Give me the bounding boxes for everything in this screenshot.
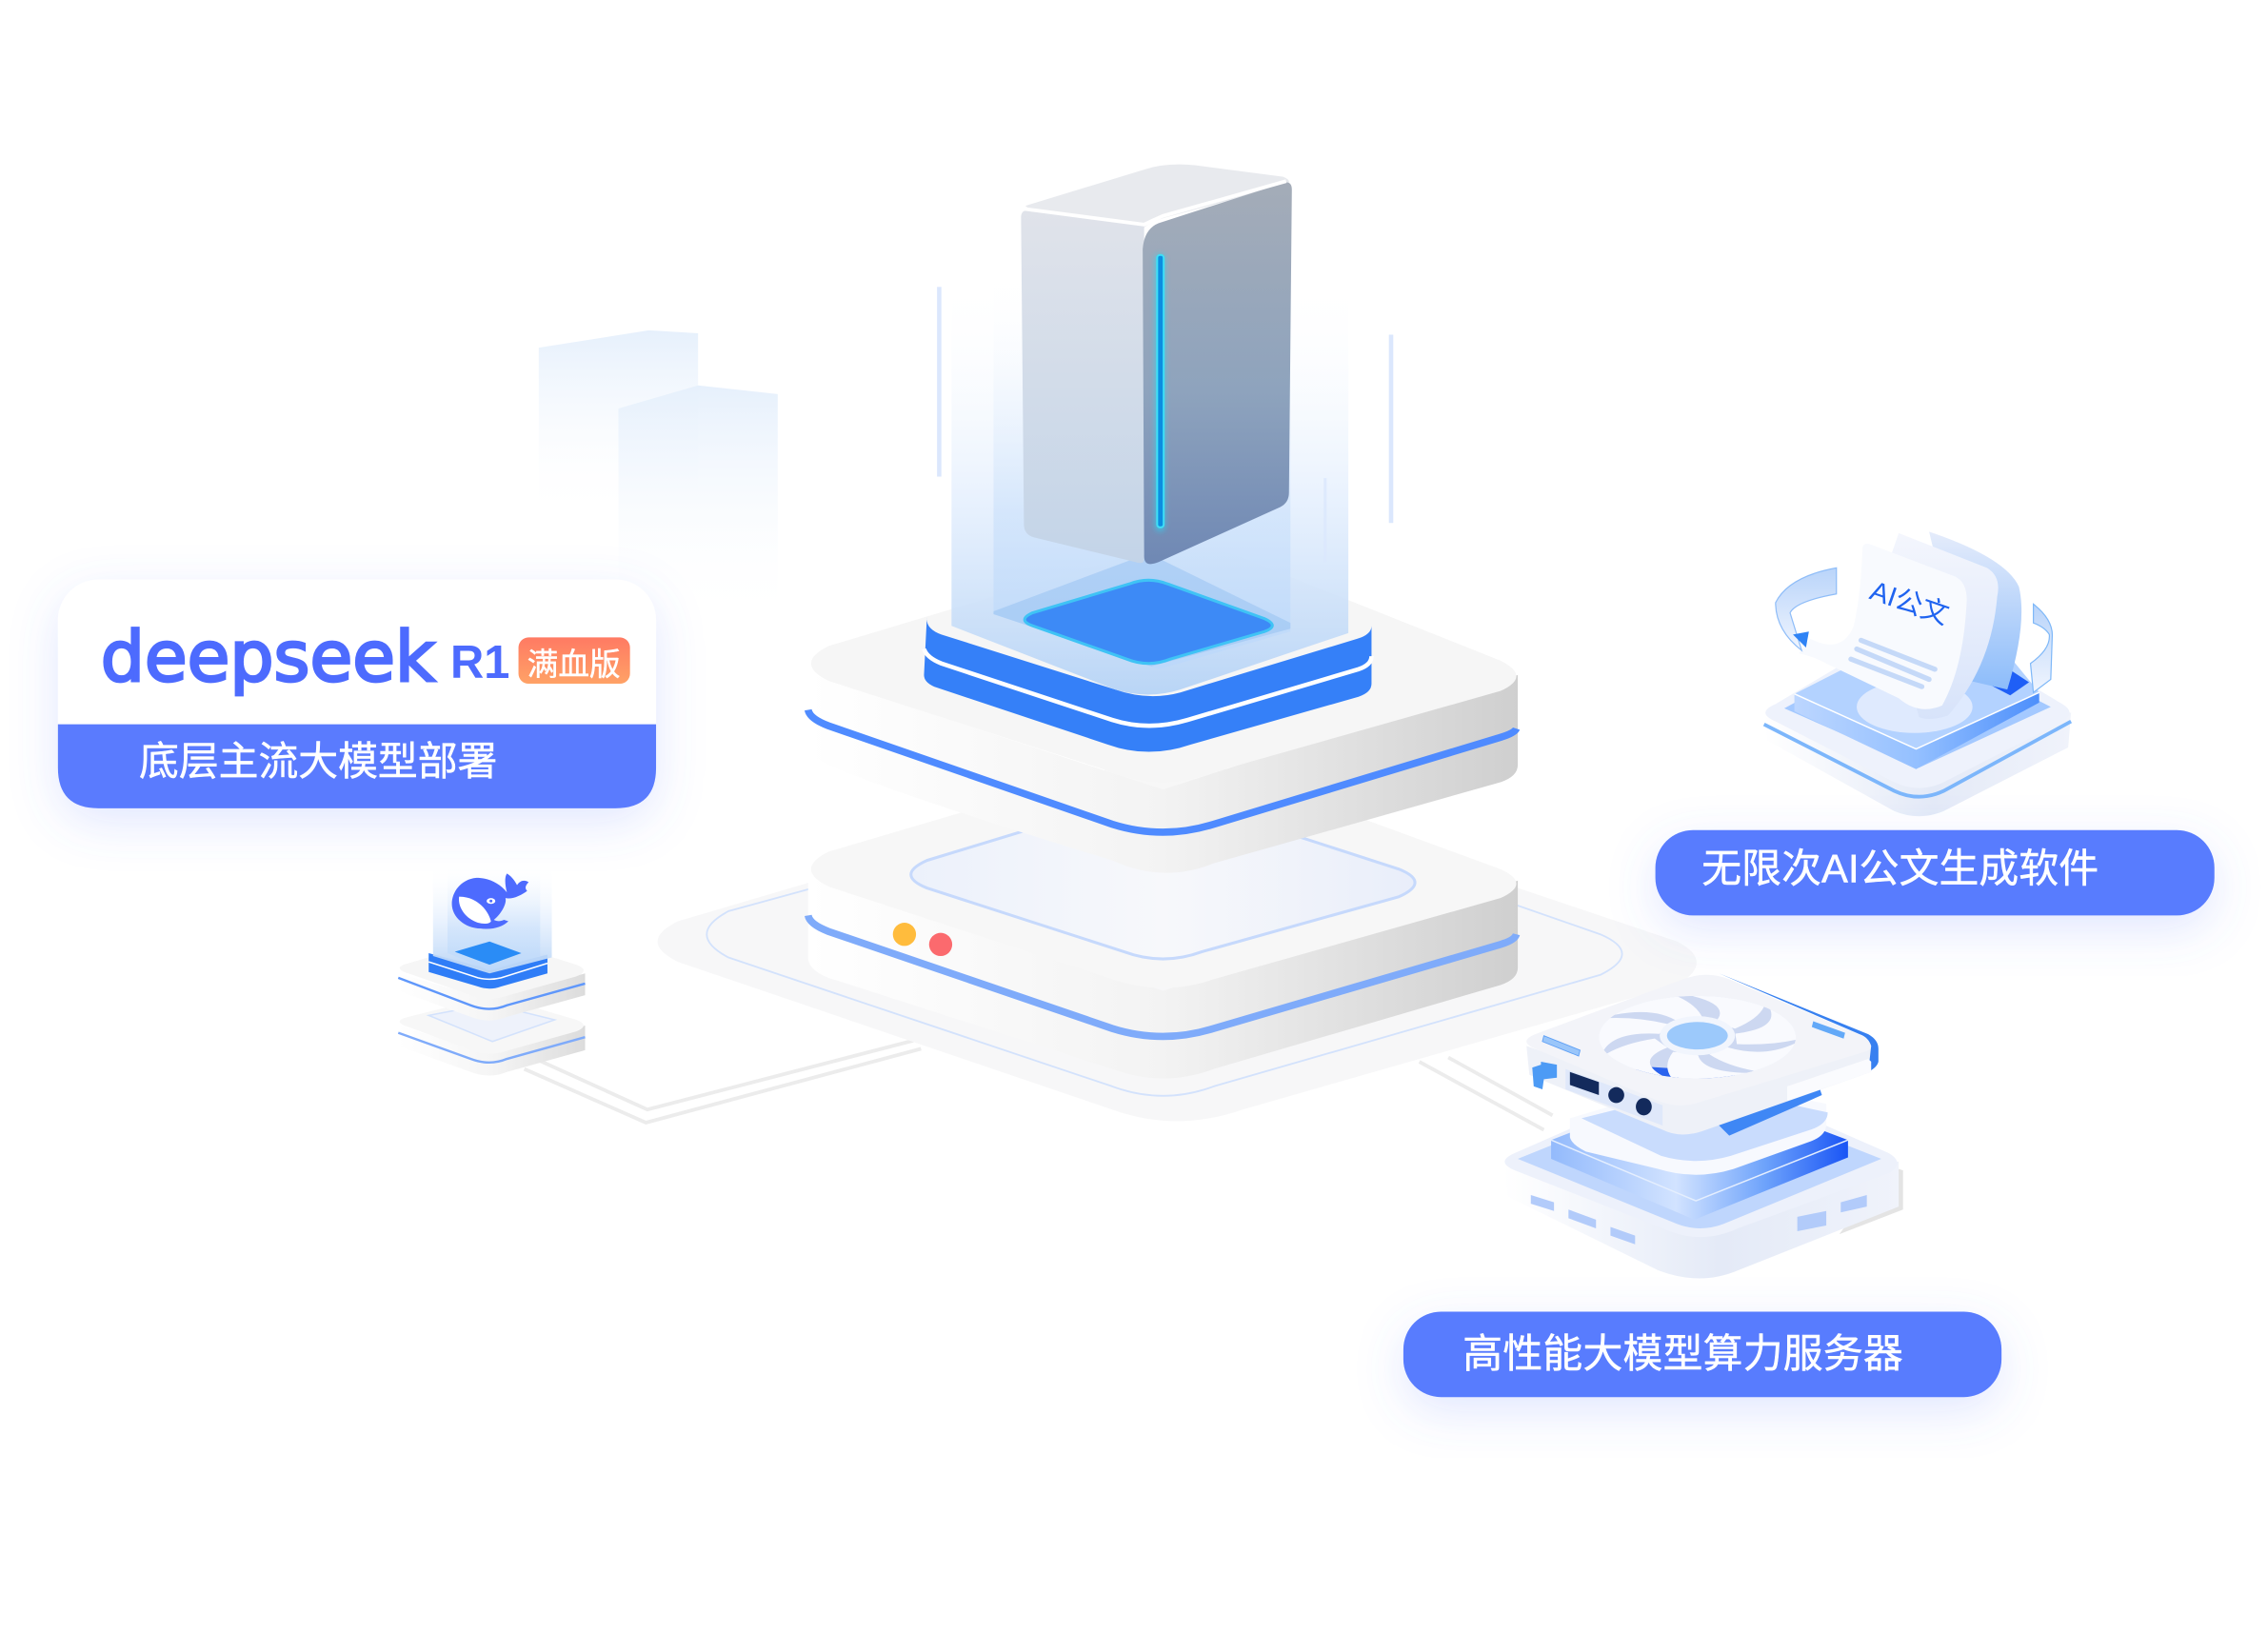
infographic canvas [44, 164, 2224, 1425]
side connector [1532, 1062, 1557, 1089]
right face [1143, 183, 1292, 564]
recess [1518, 1086, 1881, 1228]
document icon [1764, 531, 2071, 816]
back page 1 [1882, 533, 1999, 719]
icon: deepseek whale [452, 873, 528, 929]
small platform stack with whale [398, 864, 586, 1076]
blue edge [1720, 973, 1879, 1072]
glowing pad [1025, 580, 1272, 664]
side panel [1787, 1059, 1871, 1101]
badge [519, 637, 630, 684]
audio port two [1636, 1098, 1652, 1115]
glass plate [1795, 692, 2039, 769]
base vents [1531, 1195, 1867, 1245]
paper title: AI公文 [1866, 576, 1953, 631]
pill: software [1656, 830, 2215, 915]
middle disc [1570, 1079, 1826, 1175]
ghost blocks upper left [539, 330, 778, 623]
status dot red [929, 933, 952, 956]
deepseek wordmark: deepseek [101, 617, 436, 698]
small glass column [433, 864, 552, 973]
rotating arrow left [1776, 568, 1837, 650]
led strip [1155, 253, 1165, 531]
paper sheet [1799, 544, 1967, 709]
paper lines [1851, 640, 1935, 687]
upper platform [808, 547, 1518, 873]
lower platform [808, 760, 1518, 1079]
R1 label: R1 [450, 637, 509, 688]
glow disc [1582, 1086, 1828, 1161]
small pad [455, 942, 522, 965]
usb port [1570, 1072, 1599, 1095]
recess [1784, 637, 2051, 767]
lower base [1503, 1076, 1899, 1278]
audio port one [1608, 1087, 1624, 1103]
left face [1021, 210, 1144, 563]
small lower platform [398, 997, 586, 1076]
blue layered block [924, 617, 1371, 752]
band text: 底层主流大模型部署 [139, 739, 497, 784]
vent tab right [1812, 1021, 1845, 1039]
stripe [808, 915, 1517, 1036]
badge text: 满血版 [527, 647, 621, 682]
fan top face [1526, 975, 1873, 1106]
stand [1857, 681, 1973, 733]
top face [1025, 165, 1289, 228]
inner panel [911, 797, 1415, 959]
glass block [1551, 1084, 1848, 1220]
pill text: 无限次AI公文生成软件 [1701, 846, 2099, 890]
pill text: 高性能大模型算力服务器 [1462, 1331, 1903, 1376]
vent tab left [1542, 1036, 1580, 1056]
small blue block [428, 953, 547, 988]
status dot yellow [893, 923, 916, 946]
fan [1603, 996, 1796, 1078]
rotating arrow right [2031, 604, 2052, 692]
light column [951, 275, 1348, 694]
base plate [658, 784, 1697, 1121]
pill: server [1403, 1311, 2001, 1397]
fan server [1503, 973, 1903, 1278]
small upper platform [398, 941, 586, 1021]
arrow head [1793, 631, 1809, 648]
stripe [808, 709, 1517, 832]
card band [58, 725, 656, 808]
base [1764, 631, 2071, 816]
port panel [1565, 1069, 1662, 1126]
fan body side [1526, 1043, 1874, 1135]
back page 2 [1929, 531, 2021, 689]
under-glow strip [1718, 1086, 1822, 1136]
server tower [1021, 165, 1292, 564]
card: deepseek R1 [58, 580, 656, 808]
connector lines [525, 1040, 1553, 1130]
vertical accent lines [937, 287, 1393, 562]
grey shadow edge [1840, 1166, 1903, 1234]
